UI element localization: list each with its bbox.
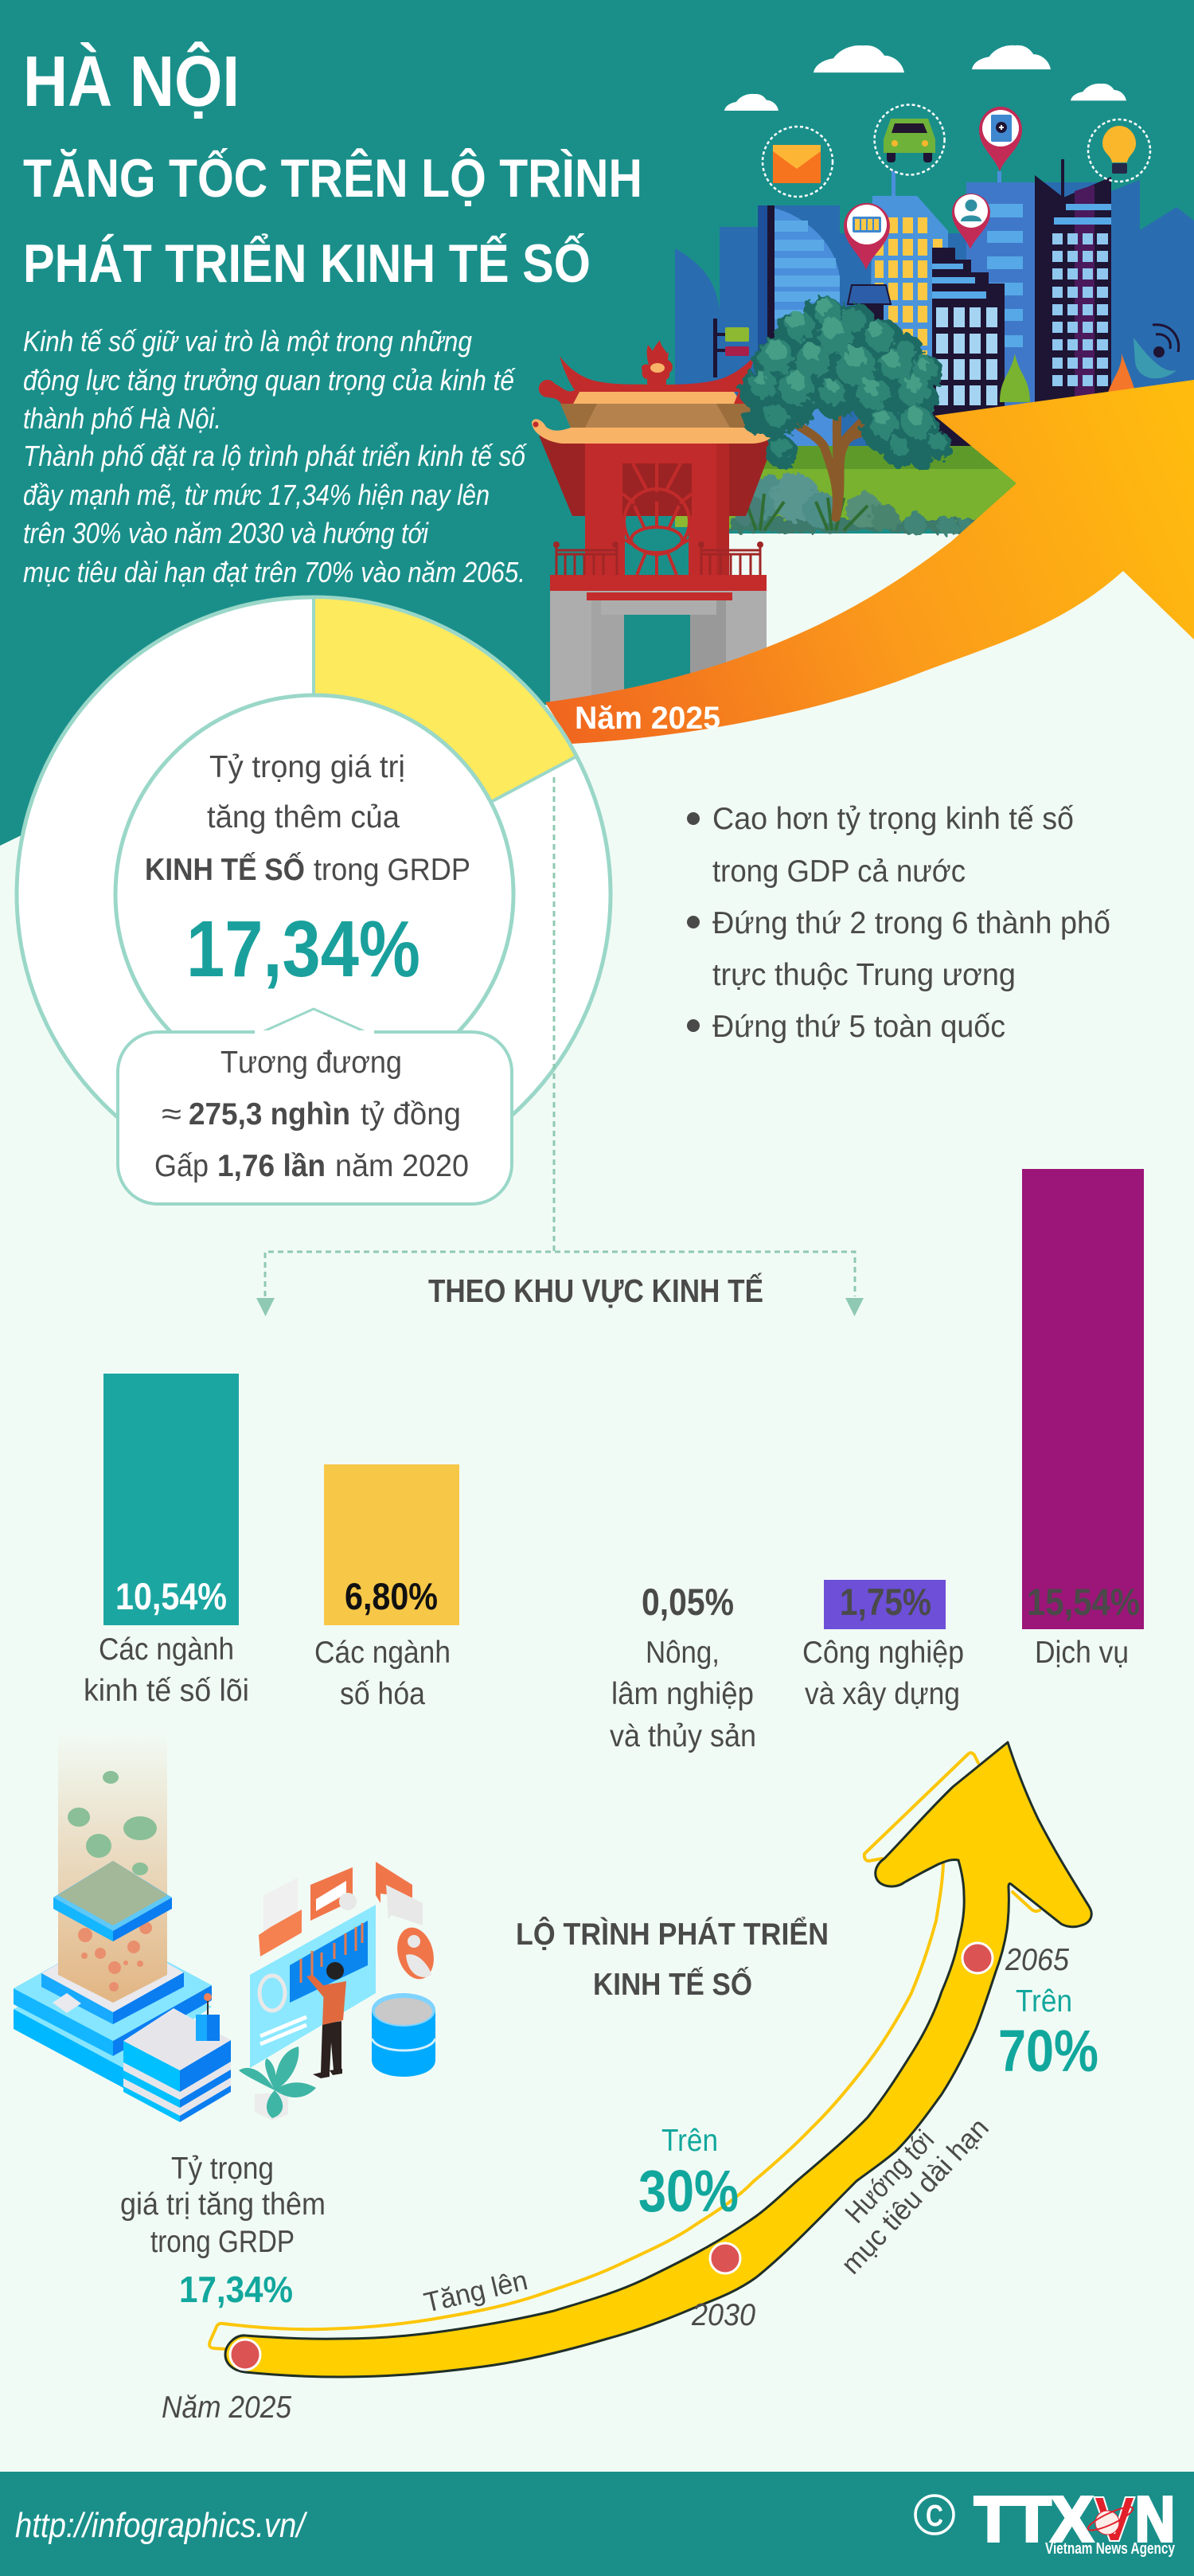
calendar bbox=[310, 1867, 353, 1921]
coins bbox=[68, 1771, 157, 1875]
bar: services: 15,54% bbox=[1027, 1581, 1140, 1623]
illustration: city skyline bbox=[675, 159, 1194, 446]
server: upper platform bbox=[113, 1985, 212, 2056]
user icon bbox=[392, 1923, 439, 1984]
logo: TTXVN: TTX bbox=[974, 2484, 1093, 2555]
arrow: thin yellow outline bbox=[209, 1753, 1040, 2349]
value: above 70%: 70% bbox=[998, 2018, 1098, 2084]
gate: red body bbox=[585, 444, 729, 575]
gate: mid roof bbox=[560, 404, 754, 428]
bar: services: Dịch vụ bbox=[1035, 1636, 1129, 1670]
bar: core digital industries: Các ngành bbox=[99, 1632, 234, 1667]
bar: industry and construction bbox=[802, 1580, 964, 1711]
dashboard panel bbox=[250, 1905, 376, 2068]
illustration: grass tufts bbox=[744, 494, 868, 530]
bar: industry and construction: 1,75% bbox=[840, 1581, 931, 1623]
label: increasing: Tăng lên bbox=[421, 2265, 530, 2319]
server: lower platform bbox=[14, 1959, 212, 2068]
callout: equivalent value: năm 2020 bbox=[335, 1149, 469, 1183]
title line 1: HÀ NỘI bbox=[23, 41, 240, 122]
bullet list: trực thuộc Trung ương bbox=[712, 958, 1016, 992]
arrow: yellow growth arrow bbox=[225, 1742, 1091, 2377]
bar: digitalized industries: số hóa bbox=[340, 1677, 425, 1711]
marker: 2025 bbox=[230, 2340, 260, 2370]
callout: equivalent value: Gấp bbox=[154, 1149, 209, 1183]
label: towards long-term target: Hướng tới bbox=[839, 2125, 940, 2229]
footer band bbox=[0, 2472, 1194, 2576]
icon: car bbox=[875, 105, 945, 175]
illustration: lawn bbox=[700, 446, 1019, 529]
label: year 2025: Năm 2025 bbox=[162, 2390, 291, 2425]
donut: yellow sector 17.34% bbox=[314, 597, 576, 803]
text: share of added value 2025: Tỷ trọng bbox=[171, 2152, 274, 2186]
heading: digital economy roadmap: KINH TẾ SỐ bbox=[593, 1966, 752, 2002]
callout: equivalent value: 275,3 nghìn bbox=[189, 1097, 350, 1132]
gate: flame ornament bbox=[642, 340, 673, 386]
illustration: data server with coins bbox=[14, 1730, 231, 2122]
value 17,34%: 17,34% bbox=[186, 905, 420, 994]
chat bubbles bbox=[376, 1862, 412, 1903]
heading: digital economy roadmap bbox=[516, 1916, 829, 2002]
connector: dashed lines bbox=[265, 777, 855, 1296]
label: year 2025 on arrow: Năm 2025 bbox=[575, 701, 720, 736]
light beam bbox=[58, 1730, 167, 2003]
folder bbox=[263, 1878, 298, 1935]
gate: grey base bbox=[550, 591, 767, 704]
bar: services bbox=[1022, 1169, 1144, 1670]
bar: digitalized industries bbox=[314, 1464, 459, 1711]
donut center text bbox=[145, 750, 470, 994]
title line 2: TĂNG TỐC TRÊN LỘ TRÌNH bbox=[23, 147, 642, 209]
icon: location pin battery bbox=[844, 203, 890, 270]
bar: digitalized industries: Các ngành bbox=[314, 1636, 451, 1670]
marker: 2030 bbox=[710, 2243, 740, 2273]
illustration: gate of Van Mieu bbox=[532, 340, 783, 704]
value: above 30% bbox=[638, 2124, 739, 2224]
intro paragraph: mục tiêu dài hạn đạt trên 70% vào năm 2065. bbox=[23, 556, 525, 588]
bar: agriculture: 0,05% bbox=[642, 1581, 734, 1623]
intro paragraph: Thành phố đặt ra lộ trình phát triển kinh tế số bbox=[23, 440, 528, 472]
heading: digital economy roadmap: LỘ TRÌNH PHÁT TRIỂN bbox=[516, 1916, 829, 1952]
gate: red crest roof bbox=[539, 356, 773, 404]
callout: equivalent value: ≈ bbox=[162, 1097, 181, 1132]
intro paragraph: thành phố Hà Nội. bbox=[23, 402, 221, 435]
title line 3: PHÁT TRIỂN KINH TẾ SỐ bbox=[23, 233, 591, 294]
donut center text: tăng thêm của bbox=[207, 800, 400, 835]
logo: TTXVN bbox=[974, 2484, 1176, 2558]
bullet list: Đứng thứ 2 trong 6 thành phố bbox=[712, 906, 1110, 940]
illustration: bushes bbox=[731, 474, 977, 535]
icon: clouds bbox=[724, 45, 1126, 111]
value: above 30%: Trên bbox=[661, 2124, 718, 2158]
illustration: analyst with dashboard bbox=[239, 1862, 439, 2121]
text: share of added value 2025: 17,34% bbox=[179, 2269, 293, 2310]
label: year 2030: 2030 bbox=[691, 2298, 755, 2332]
callout: equivalent value: tỷ đồng bbox=[361, 1097, 461, 1132]
bar: core digital industries: 10,54% bbox=[115, 1575, 227, 1617]
gate: window lattice bbox=[622, 463, 692, 516]
icon: mail bbox=[763, 127, 833, 197]
intro paragraph: đầy mạnh mẽ, từ mức 17,34% hiện nay lên bbox=[23, 479, 490, 511]
donut center text: trong GRDP bbox=[314, 853, 470, 887]
logo: TTXVN: N bbox=[1135, 2484, 1175, 2555]
footer url: http://infographics.vn/ bbox=[15, 2506, 307, 2545]
gate: railings bbox=[556, 544, 760, 575]
bar: agriculture: lâm nghiệp bbox=[611, 1677, 754, 1711]
icon: light bulb bbox=[1088, 119, 1150, 182]
decorative text block: title bbox=[23, 41, 642, 294]
bar: core digital industries: kinh tế số lõi bbox=[84, 1674, 249, 1708]
icon: copyright bbox=[915, 2496, 954, 2534]
logo: TTXVN: V bbox=[1094, 2484, 1135, 2555]
floating tile bbox=[53, 1861, 172, 1941]
value: above 30%: 30% bbox=[638, 2158, 739, 2224]
donut center text: KINH TẾ SỐ bbox=[145, 851, 305, 887]
bar: agriculture: và thủy sản bbox=[610, 1719, 756, 1753]
callout: equivalent value bbox=[118, 1009, 512, 1204]
background: teal header bbox=[0, 0, 1194, 846]
arrow: orange upward bbox=[545, 380, 1194, 744]
database bbox=[372, 2010, 435, 2077]
icon: copyright: C bbox=[926, 2500, 943, 2533]
text: share of added value 2025 bbox=[120, 2152, 326, 2310]
bullet list bbox=[687, 802, 1110, 1044]
gate: lower roof bbox=[532, 419, 783, 444]
gate: upper roof bbox=[573, 392, 742, 404]
callout: equivalent value: 1,76 lần bbox=[217, 1149, 326, 1183]
intro paragraph bbox=[23, 325, 528, 588]
bullet list: Đứng thứ 5 toàn quốc bbox=[712, 1010, 1005, 1044]
illustration: tree foliage bbox=[739, 297, 953, 470]
bullet list: trong GDP cả nước bbox=[712, 854, 966, 889]
value: above 70% bbox=[998, 1984, 1098, 2084]
bar: industry and construction: và xây dựng bbox=[805, 1677, 960, 1711]
callout: equivalent value: Tương đương bbox=[220, 1046, 402, 1080]
plant bbox=[255, 2092, 288, 2121]
gate: side eaves bbox=[539, 436, 585, 516]
bar: agriculture: Nông, bbox=[646, 1636, 720, 1670]
gate: ledge bbox=[550, 575, 767, 591]
bar: agriculture bbox=[610, 1581, 756, 1753]
marker: 2065 bbox=[962, 1943, 993, 1973]
front server box bbox=[123, 2041, 180, 2122]
intro paragraph: trên 30% vào năm 2030 và hướng tới bbox=[23, 517, 429, 549]
bullet list: Cao hơn tỷ trọng kinh tế số bbox=[712, 802, 1074, 836]
heading: by economic sector: THEO KHU VỰC KINH TẾ bbox=[428, 1272, 763, 1309]
chart: donut of digital economy share bbox=[17, 597, 611, 1191]
illustration: tree trunk bbox=[788, 402, 880, 518]
text: share of added value 2025: giá trị tăng thêm bbox=[120, 2187, 326, 2222]
person bbox=[321, 2021, 341, 2073]
donut center text: Tỷ trọng giá trị bbox=[209, 750, 405, 784]
intro paragraph: động lực tăng trưởng quan trọng của kinh tế bbox=[23, 364, 517, 397]
text: share of added value 2025: trong GRDP bbox=[150, 2225, 295, 2259]
arrowhead left bbox=[256, 1298, 275, 1316]
bar: digitalized industries: 6,80% bbox=[345, 1575, 438, 1617]
icon: location pin medical bbox=[979, 107, 1022, 171]
value: above 70%: Trên bbox=[1016, 1984, 1072, 2019]
label: towards long-term target: mục tiêu dài hạn bbox=[835, 2113, 995, 2280]
label: year 2065: 2065 bbox=[1005, 1943, 1069, 1977]
bar: core digital industries bbox=[84, 1374, 249, 1708]
arrowhead right bbox=[845, 1298, 864, 1316]
intro paragraph: Kinh tế số giữ vai trò là một trong những bbox=[23, 325, 472, 358]
icon: location pin person bbox=[952, 193, 990, 249]
bar: industry and construction: Công nghiệp bbox=[802, 1636, 964, 1670]
